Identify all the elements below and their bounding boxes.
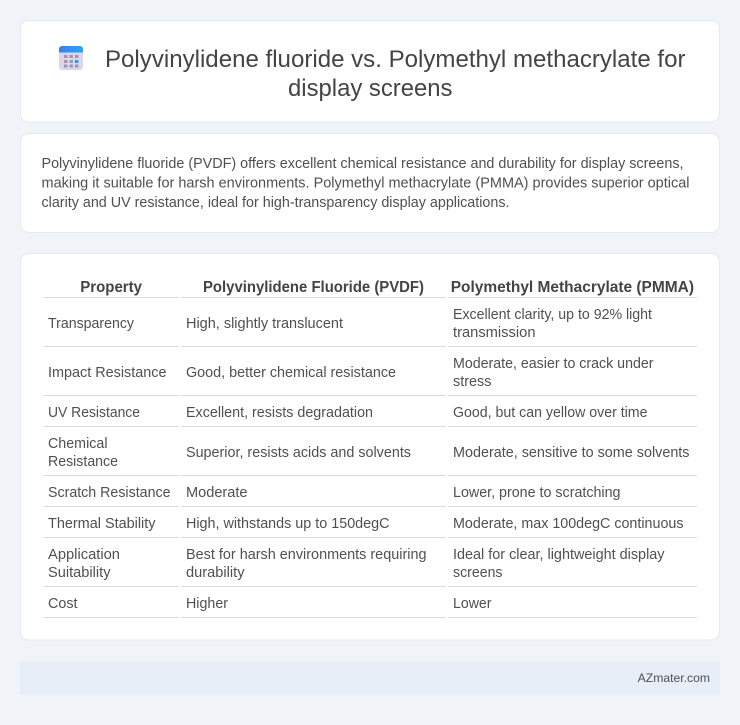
table row: Chemical Resistance: Superior, resists acids and solvents bbox=[186, 445, 411, 461]
table row: Application Suitability: Best for harsh environments requiring bbox=[186, 547, 426, 563]
table row: Chemical Resistance: Chemical bbox=[48, 436, 108, 452]
table header: Polymethyl Methacrylate (PMMA) bbox=[451, 279, 694, 296]
table row: Application Suitability: screens bbox=[453, 565, 502, 581]
panel: comparison table card bbox=[20, 254, 720, 640]
table row: Scratch Resistance: Lower, prone to scratching bbox=[453, 485, 620, 501]
table row: UV Resistance: Good, but can yellow over time bbox=[453, 405, 648, 421]
table row: UV Resistance bbox=[43, 405, 697, 427]
table row: Transparency bbox=[43, 307, 697, 347]
table row: Chemical Resistance: Moderate, sensitive to some solvents bbox=[453, 445, 690, 461]
table row: Scratch Resistance bbox=[43, 485, 697, 507]
table row: Transparency: Excellent clarity, up to 92% light bbox=[453, 307, 652, 323]
panel: summary card bbox=[20, 134, 720, 232]
table row: UV Resistance: Excellent, resists degradation bbox=[186, 405, 373, 421]
table row: Impact Resistance: stress bbox=[453, 374, 492, 390]
table row: Application Suitability: Suitability bbox=[48, 565, 111, 581]
table row: Impact Resistance: Impact Resistance bbox=[48, 365, 166, 381]
table row: UV Resistance: UV Resistance bbox=[48, 405, 140, 421]
table row: Thermal Stability bbox=[43, 516, 697, 538]
title: display screens bbox=[288, 75, 452, 102]
table row: Transparency: Transparency bbox=[48, 316, 135, 332]
table row: Application Suitability bbox=[43, 547, 697, 587]
table row: Thermal Stability: Thermal Stability bbox=[48, 516, 156, 532]
title: Polyvinylidene fluoride vs. Polymethyl methacrylate for bbox=[105, 46, 686, 73]
table header: Property bbox=[80, 279, 142, 296]
table row: Application Suitability: Application bbox=[48, 547, 120, 563]
panel: title card bbox=[20, 20, 720, 122]
table row: Transparency: High, slightly translucent bbox=[186, 316, 343, 332]
title bbox=[105, 46, 686, 102]
table row: Application Suitability: durability bbox=[186, 565, 245, 581]
table row: Application Suitability: Ideal for clear, lightweight display bbox=[453, 547, 665, 563]
text block: summary: clarity and UV resistance, ideal for high-transparency display applications. bbox=[42, 195, 510, 211]
table row: Cost: Higher bbox=[186, 596, 228, 612]
table row: Scratch Resistance: Scratch Resistance bbox=[48, 485, 170, 501]
table row: Chemical Resistance: Resistance bbox=[48, 454, 118, 470]
table row: Impact Resistance bbox=[43, 356, 697, 396]
footer source text: AZmater.com bbox=[638, 671, 710, 685]
table row: Cost: Cost bbox=[48, 596, 78, 612]
table row: Thermal Stability: High, withstands up to 150degC bbox=[186, 516, 390, 532]
text block: summary bbox=[42, 156, 690, 211]
table row: Cost bbox=[43, 596, 697, 618]
table row: Impact Resistance: Good, better chemical resistance bbox=[186, 365, 396, 381]
table row: Impact Resistance: Moderate, easier to crack under bbox=[453, 356, 654, 372]
table row: Thermal Stability: Moderate, max 100degC continuous bbox=[453, 516, 684, 532]
table header: Polyvinylidene Fluoride (PVDF) bbox=[203, 279, 424, 296]
text block: summary: making it suitable for harsh environments. Polymethyl methacrylate (PMMA) provides superior optical bbox=[42, 176, 690, 192]
table header bbox=[43, 279, 697, 298]
table row: Transparency: transmission bbox=[453, 325, 536, 341]
text block: summary: Polyvinylidene fluoride (PVDF) offers excellent chemical resistance and durability for display screens, bbox=[42, 156, 684, 172]
table row: Chemical Resistance bbox=[43, 436, 697, 476]
footer bar bbox=[20, 661, 720, 695]
table row: Scratch Resistance: Moderate bbox=[186, 485, 248, 501]
icon: calendar bbox=[59, 46, 83, 70]
table row: Cost: Lower bbox=[453, 596, 492, 612]
